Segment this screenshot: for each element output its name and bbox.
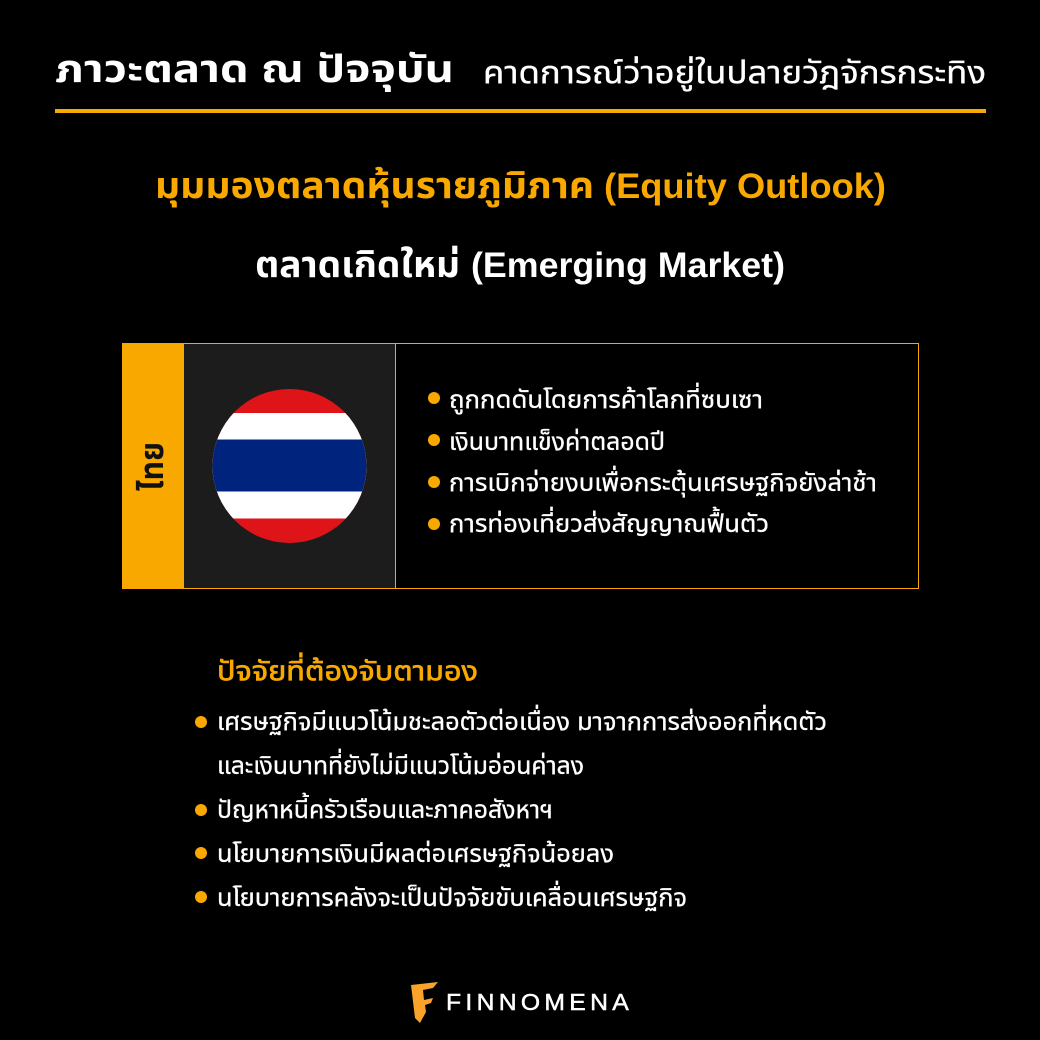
factor 4: นโยบายการคลังจะเป็นปัจจัยขับเคลื่อนเศรษฐกิจ: [217, 880, 687, 912]
factor 1: เศรษฐกิจมีแนวโน้มชะลอตัวต่อเนื่อง มาจากการส่งออกที่หดตัว: [217, 704, 827, 736]
heading: equity outlook: มุมมองตลาดหุ้นรายภูมิภาค: [155, 165, 594, 207]
heading: emerging market: ตลาดเกิดใหม่: [255, 244, 460, 285]
country tab: [122, 343, 184, 589]
heading: equity outlook: [155, 165, 886, 207]
factor 1: [195, 704, 827, 780]
bullet 2: เงินบาทแข็งค่าตลอดปี: [449, 428, 665, 456]
section: factors to watch: [195, 652, 827, 912]
factor 3: นโยบายการเงินมีผลต่อเศรษฐกิจน้อยลง: [217, 840, 614, 868]
heading: emerging market: (Emerging Market): [471, 246, 785, 285]
panel: Thailand: [122, 343, 918, 589]
factor 2: ปัญหาหนี้ครัวเรือนและภาคอสังหาฯ: [217, 792, 553, 824]
header: [55, 49, 986, 113]
section heading: ปัจจัยที่ต้องจับตามอง: [217, 652, 478, 686]
icon: F mark: [411, 982, 438, 1023]
logo: FINNOMENA: [411, 982, 633, 1023]
flag panel: [184, 344, 396, 588]
factors list: [195, 704, 827, 912]
heading: emerging market: [255, 244, 785, 285]
heading: equity outlook: (Equity Outlook): [604, 167, 886, 206]
subtitle: คาดการณ์ว่าอยู่ในปลายวัฎจักรกระทิง: [483, 55, 986, 91]
panel outline: [122, 344, 918, 588]
bullet list: Thailand: [428, 382, 877, 538]
factor 1: และเงินบาทที่ยังไม่มีแนวโน้มอ่อนค่าลง: [217, 748, 584, 780]
bullet 4: การท่องเที่ยวส่งสัญญาณฟื้นตัว: [449, 506, 769, 538]
bullet 1: ถูกกดดันโดยการค้าโลกที่ซบเซา: [449, 382, 763, 415]
icon: Thai flag: [210, 385, 370, 547]
header rule: [55, 109, 986, 113]
wordmark: FINNOMENA: [446, 989, 633, 1015]
country tab: ไทย: [133, 442, 170, 491]
bullet 3: การเบิกจ่ายงบเพื่อกระตุ้นเศรษฐกิจยังล่าช้า: [449, 465, 877, 498]
title: ภาวะตลาด ณ ปัจจุบัน: [55, 49, 454, 92]
divider: [395, 344, 396, 588]
